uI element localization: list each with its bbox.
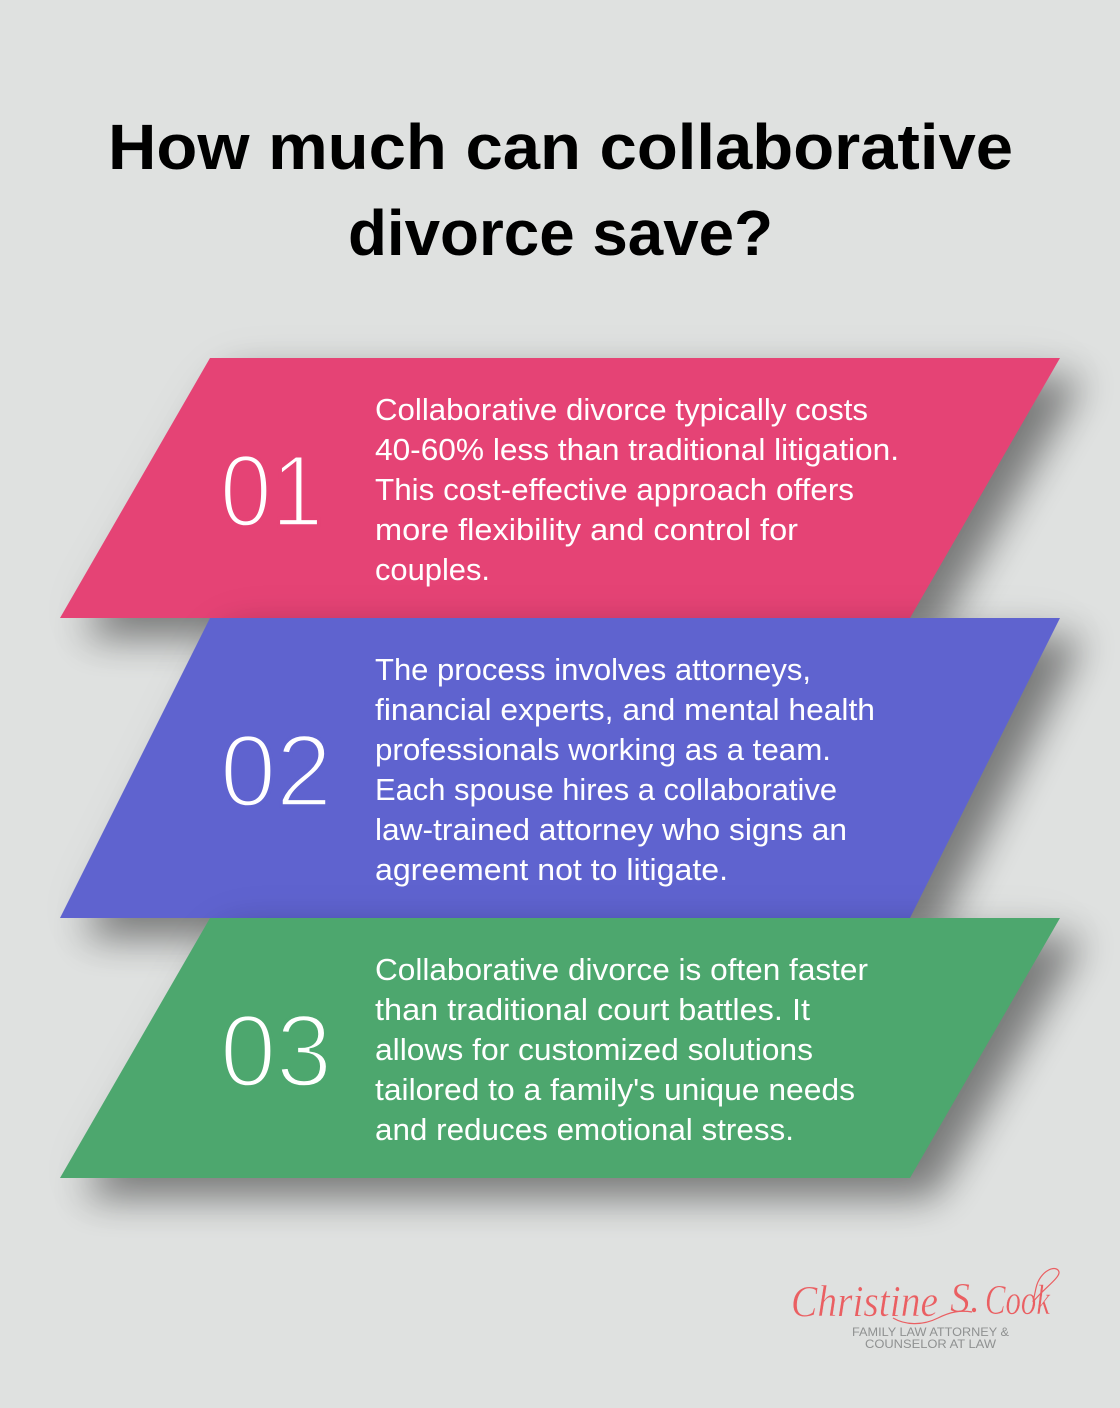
panel 1 text: couples.	[375, 552, 490, 587]
logo swash	[893, 1269, 1059, 1324]
panel 1 text	[375, 392, 899, 587]
logo surname: Cook	[985, 1278, 1051, 1324]
panel 2 text: law-trained attorney who signs an	[375, 812, 847, 847]
panel 2 text: financial experts, and mental health	[375, 692, 875, 727]
logo tagline: COUNSELOR AT LAW	[865, 1339, 996, 1351]
panel 3 text	[375, 952, 868, 1147]
title: divorce save?	[348, 197, 773, 269]
panel 1 text: more flexibility and control for	[375, 512, 798, 547]
logo tagline	[852, 1327, 1009, 1351]
panel 3 text: than traditional court battles. It	[375, 992, 810, 1027]
panel 1 text: This cost-effective approach offers	[375, 472, 854, 507]
title: How much can collaborative	[108, 111, 1013, 183]
logo: Christine S. Cook	[791, 1269, 1059, 1351]
panel 3 text: allows for customized solutions	[375, 1032, 813, 1067]
logo name: Christine	[791, 1277, 938, 1326]
title	[108, 111, 1013, 269]
number 01: 01	[220, 434, 323, 548]
panel 3: speed and flexibility	[60, 918, 1084, 1198]
panel 3 text: Collaborative divorce is often faster	[375, 952, 868, 987]
number 03: 03	[220, 994, 332, 1108]
panel 2 text: professionals working as a team.	[375, 732, 831, 767]
logo tagline: FAMILY LAW ATTORNEY &	[852, 1327, 1009, 1339]
logo initial: S.	[950, 1276, 980, 1322]
panel 3 text: and reduces emotional stress.	[375, 1112, 794, 1147]
panel 2: team process	[60, 618, 1084, 938]
panel 2 text: The process involves attorneys,	[375, 652, 811, 687]
panel 1 text: 40-60% less than traditional litigation.	[375, 432, 899, 467]
panel 1: cost savings	[60, 358, 1084, 638]
panel 2 text: agreement not to litigate.	[375, 852, 728, 887]
panel 2 text: Each spouse hires a collaborative	[375, 772, 837, 807]
panel 3 text: tailored to a family's unique needs	[375, 1072, 855, 1107]
panel 2 text	[375, 652, 875, 887]
panel 1 text: Collaborative divorce typically costs	[375, 392, 868, 427]
number 02: 02	[220, 714, 332, 828]
